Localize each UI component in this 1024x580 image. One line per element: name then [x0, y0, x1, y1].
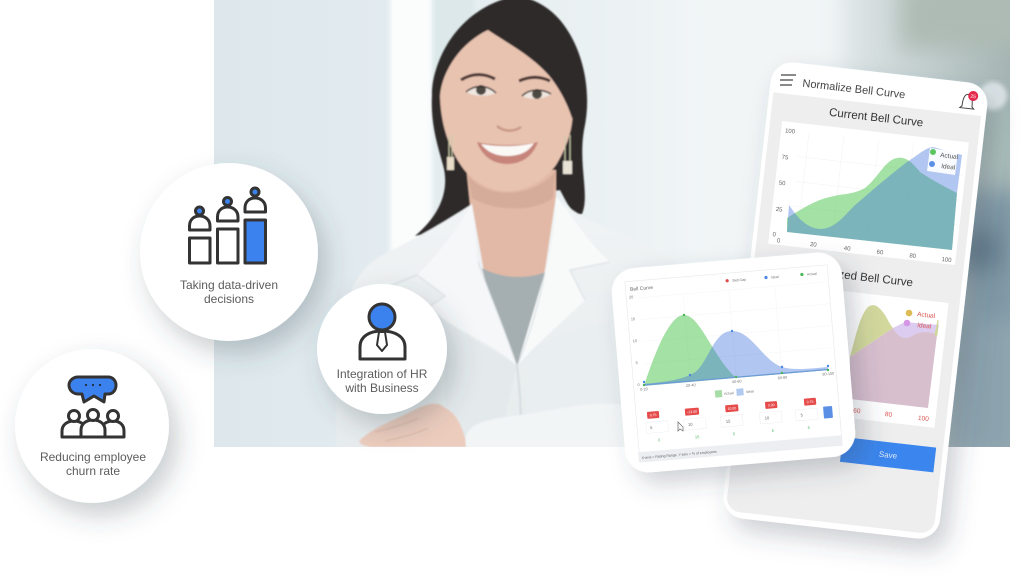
hair back — [415, 0, 587, 236]
face — [440, 30, 573, 191]
chart legend: current — [927, 148, 959, 175]
skill gap badges: 3.00 — [768, 403, 775, 408]
green values row: 6 — [807, 425, 811, 430]
icon: hamburger menu — [780, 75, 796, 85]
x axis labels — [640, 372, 834, 392]
chart: normalized bell curve areas — [850, 305, 939, 408]
label: Integration of HR — [337, 367, 428, 381]
sleeve — [465, 404, 625, 450]
axis labels: current chart: 100 — [785, 128, 796, 136]
axis note bar — [638, 435, 842, 462]
earrings — [447, 157, 454, 170]
notification bell icon: 25 — [970, 94, 976, 100]
chart legend: normalized: Actual — [917, 311, 936, 320]
input boxes: 15 — [726, 418, 731, 424]
skill gap badges — [647, 398, 816, 419]
axis labels: current chart: 50 — [778, 181, 786, 187]
collars — [433, 293, 514, 362]
bottom legend: Actual — [724, 391, 734, 396]
nose — [497, 126, 521, 131]
axis labels: current chart: 40 — [843, 246, 851, 253]
chart card: normalized bell curve — [750, 282, 949, 428]
green values row: 5 — [772, 428, 775, 433]
bottom legend — [715, 387, 754, 398]
save button — [840, 437, 936, 472]
phone mockup: Normalize Bell Curve — [721, 60, 990, 541]
axis labels: current chart — [772, 128, 965, 264]
hand — [360, 404, 467, 447]
label: decisions — [204, 292, 254, 306]
y axis labels: 5 — [635, 361, 638, 365]
top legend: Actual — [807, 272, 817, 277]
input boxes — [646, 408, 818, 434]
green values row: 5 — [733, 431, 736, 436]
skill gap badges: -13.00 — [687, 410, 697, 414]
skill gap badges: 0.75 — [807, 400, 814, 404]
chart frame — [625, 265, 842, 462]
save icon button — [823, 406, 833, 419]
chart: skill gap bell curves — [643, 314, 829, 386]
phone header title: Normalize Bell Curve — [802, 78, 906, 101]
x axis labels: 40-60 — [732, 379, 742, 384]
green values row: 15 — [695, 434, 700, 439]
x axis labels: 80-100 — [822, 372, 834, 377]
x axis labels: 60-80 — [777, 376, 787, 380]
axis labels: current chart: 100 — [941, 257, 952, 264]
label: churn rate — [66, 464, 120, 478]
top legend — [725, 272, 817, 283]
label: Reducing employee — [40, 450, 146, 464]
axis labels: current chart: 0 — [777, 238, 781, 245]
chart: current bell curve areas — [787, 147, 962, 250]
axis labels: current chart: 25 — [775, 207, 783, 214]
axis labels: current chart: 20 — [810, 242, 818, 249]
green values row — [658, 425, 811, 443]
badge: Integration of HR with Business — [317, 284, 447, 414]
axis labels: current chart: 0 — [772, 232, 777, 239]
heading: Normalized Bell Curve: Normalized Bell Curve — [798, 264, 914, 289]
y axis labels: 15 — [631, 317, 635, 321]
top legend: Ideal — [771, 275, 779, 280]
input boxes: 5 — [650, 425, 653, 430]
tablet body — [610, 251, 857, 474]
badge: Taking data-driven decisions — [140, 163, 318, 341]
chart title: Bell Curve — [630, 285, 654, 293]
axis labels: normalized chart: 80 — [885, 411, 893, 419]
tablet card: Bell Curve editor — [610, 251, 857, 474]
phone screen panel — [726, 92, 981, 534]
phone body — [721, 60, 990, 541]
label: with Business — [344, 381, 419, 395]
chart legend: normalized: Ideal — [917, 322, 932, 331]
badge: Reducing employee churn rate — [15, 349, 169, 503]
axis labels: normalized chart — [853, 407, 929, 423]
axis labels: normalized chart: 60 — [853, 407, 861, 415]
coat shading — [430, 306, 517, 447]
chart legend: current: Actual — [940, 152, 959, 161]
sweater — [482, 268, 546, 366]
label: Taking data-driven — [180, 278, 278, 292]
input boxes: 10 — [688, 422, 693, 427]
photo: smiling woman in a white lab coat — [214, 0, 1024, 460]
green values row: 6 — [658, 437, 661, 443]
axis labels: current chart: 80 — [909, 253, 917, 260]
axis labels: current chart: 60 — [876, 250, 884, 256]
icon: mouse cursor — [678, 422, 683, 431]
coat — [352, 198, 582, 304]
chart legend: current: Ideal — [941, 163, 956, 172]
icon: rising people on bars — [190, 188, 266, 263]
grid — [639, 282, 836, 385]
y axis labels — [629, 295, 641, 387]
mouth — [477, 142, 538, 164]
axis labels: current chart: 75 — [781, 155, 789, 162]
y axis labels: 20 — [629, 295, 633, 299]
skill gap badges: 10.00 — [727, 406, 736, 411]
notification bell icon — [960, 90, 979, 109]
axis labels: normalized chart: 100 — [918, 415, 929, 423]
top legend: Skill Gap — [732, 278, 746, 283]
icon: team with speech bubble — [62, 377, 124, 437]
input boxes: 5 — [800, 412, 804, 418]
x axis labels: 0-20 — [640, 387, 648, 392]
bottom legend: Ideal — [746, 389, 754, 394]
chart card: current bell curve — [768, 121, 969, 265]
y axis labels: 10 — [633, 339, 637, 343]
icon: person with tie — [360, 304, 405, 359]
heading: Current Bell Curve: Current Bell Curve — [828, 107, 924, 129]
neck — [466, 165, 556, 285]
chart legend: normalized — [904, 310, 936, 331]
input boxes: 10 — [765, 415, 770, 421]
brows and eyes — [461, 75, 495, 80]
skill gap badges: 0.75 — [650, 413, 657, 417]
axis note: X-axis = Rating Range, Y-axis = % of employees — [642, 450, 717, 460]
y axis labels: 0 — [637, 383, 640, 387]
save label: Save — [878, 450, 898, 461]
x axis labels: 20-40 — [686, 383, 696, 388]
